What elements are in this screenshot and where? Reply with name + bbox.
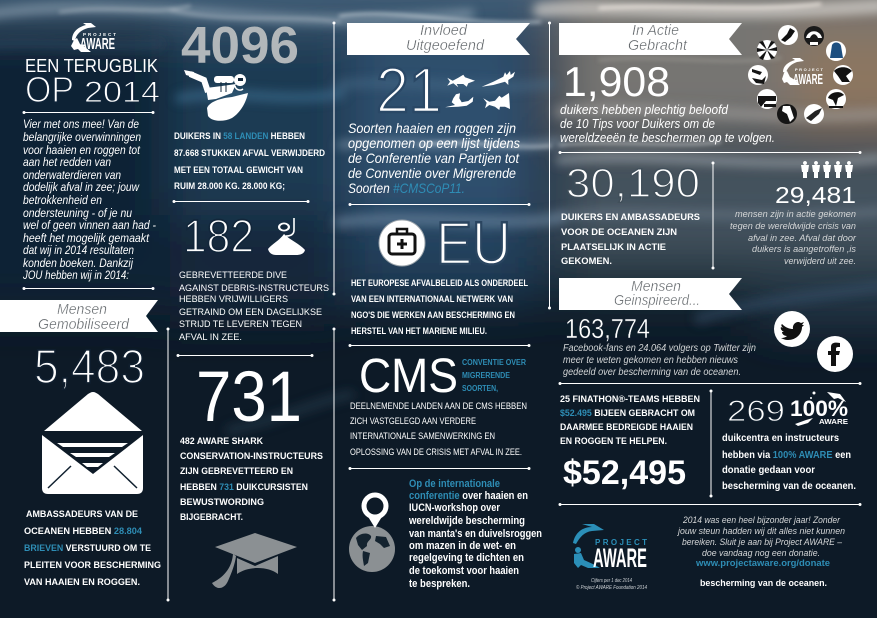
number 29,481: 29,481 — [775, 182, 856, 208]
text: shark conservation: 482 AWARE SHARK — [180, 436, 263, 447]
text: finathon teams: DAARMEE BEDREIGDE HAAIEN — [560, 422, 693, 433]
text: finathon teams — [560, 394, 700, 447]
text: mensen in actie: afval in zee. Afval dat door — [748, 233, 857, 244]
panel: 182 instructeurs — [179, 210, 329, 343]
icon: 100% AWARE logo: AWARE — [819, 419, 848, 426]
intro text: onderwaterdieren van — [23, 168, 121, 182]
text: shark conservation: CONSERVATION-INSTRUCTEURS — [180, 451, 323, 462]
panel: finathon — [560, 394, 700, 492]
panel: 29,481 — [730, 161, 857, 267]
text: closing message: doe vandaag nog een donatie. — [702, 548, 820, 559]
heading CMS: CMS — [359, 350, 458, 403]
icon: 100% AWARE logo: 100% — [790, 396, 848, 421]
text: conferentie: van manta's en duivelsroggen — [409, 528, 542, 540]
text: ambassadeurs: PLEITEN VOOR BESCHERMING — [24, 560, 161, 571]
banner: Geinspireerd... — [614, 292, 700, 309]
text: soorten haaien: de Conferentie van Partijen tot — [348, 150, 520, 166]
text: conferentie: Op de internationale — [409, 478, 500, 490]
text: gebrevetteerde instructeurs: AFVAL IN ZEE. — [179, 332, 242, 343]
icon: five people — [801, 161, 853, 178]
text: conferentie: IUCN-workshop over — [409, 502, 501, 514]
title: OP — [25, 69, 74, 110]
text: gebrevetteerde instructeurs — [179, 270, 329, 343]
text: shark conservation: BIJGEBRACHT. — [180, 512, 243, 523]
intro text: wel of geen vinnen aan had - — [23, 218, 156, 232]
text: closing message: bereiken. Sluit je aan bij Project AWARE – — [682, 537, 843, 548]
title — [25, 56, 160, 110]
icon: twitter — [774, 311, 810, 347]
banner: Gebracht — [628, 37, 688, 54]
panel: 4096 duikers — [174, 17, 325, 192]
icon: ring of ten tips — [748, 25, 853, 124]
text: 10 tips: duikers hebben plechtig beloofd — [560, 102, 729, 117]
logo: Project AWARE center: AWARE — [793, 71, 823, 88]
number 30,190: 30,190 — [566, 160, 700, 206]
icon: first aid kit — [379, 220, 425, 266]
text: conferentie — [408, 478, 542, 590]
text: conferentie: wereldwijde bescherming — [408, 515, 525, 527]
text: soorten haaien: de Conventie over Migrerende — [348, 165, 516, 181]
text: gebrevetteerde instructeurs: GETRAIND OM EEN DAGELIJKSE — [179, 307, 322, 318]
text: conventie over migrerende soorten: CONVENTIE OVER — [462, 358, 526, 367]
banner — [0, 300, 158, 333]
text: finathon teams: $52.495 BIJEEN GEBRACHT OM — [560, 408, 695, 419]
text: mensen in actie: mensen zijn in actie gekomen — [735, 209, 856, 220]
intro text: konden boeken. Dankzij — [23, 256, 133, 270]
text: ambassadeurs: AMBASSADEURS VAN DE — [26, 509, 138, 520]
text: gebrevetteerde instructeurs: AGAINST DEBRIS-INSTRUCTEURS — [179, 283, 329, 294]
banner — [347, 22, 530, 55]
icon: snorkel mask — [268, 218, 305, 255]
intro text: Vier met ons mee! Van de — [23, 117, 139, 131]
banner: Uitgeoefend — [406, 37, 485, 54]
text: gebrevetteerde instructeurs: GEBREVETTEERDE DIVE — [179, 270, 287, 281]
text: footnote — [576, 578, 647, 591]
logo: Project AWARE white — [71, 23, 116, 53]
text: closing message: jouw steun hadden wij dit alles niet kunnen — [676, 526, 845, 537]
banner — [559, 278, 742, 310]
banner: Mensen — [57, 301, 107, 318]
intro text: aan het redden van — [23, 155, 111, 169]
text: footnote: © Project AWARE Foundation 2014 — [576, 584, 647, 591]
logo: Project AWARE blue: AWARE — [593, 543, 647, 573]
icon: 100% AWARE logo — [790, 392, 848, 426]
panel: CMS — [350, 350, 527, 458]
text: duikers en ambassadeurs: VOOR DE OCEANEN ZIJN — [561, 227, 677, 238]
text: conferentie: conferentie over haaien en — [409, 490, 528, 502]
text: duikers en ambassadeurs — [561, 212, 700, 267]
text: facebook fans — [563, 343, 756, 378]
text: soorten haaien — [348, 120, 520, 196]
text: soorten haaien: opgenomen op een lijst tijdens — [348, 135, 520, 151]
text: duikcentra: donatie gedaan voor — [722, 464, 815, 476]
text: Europees afvalbeleid: HERSTEL VAN HET MARIENE MILIEU. — [351, 326, 487, 337]
text: afval verwijderd: 87.668 STUKKEN AFVAL VERWIJDERD — [174, 148, 325, 159]
text: finathon teams: EN ROGGEN TE HELPEN. — [560, 436, 667, 447]
intro text: voor haaien en roggen tot — [23, 143, 141, 157]
text: duikcentra: duikcentra en instructeurs — [722, 432, 839, 444]
logo: Project AWARE white: AWARE — [80, 36, 115, 53]
number 269: 269 — [727, 395, 785, 428]
text: conferentie: te bespreken. — [409, 578, 470, 590]
panel: 731 shark conservation — [180, 358, 323, 588]
text: shark conservation — [180, 436, 323, 523]
intro text: JOU hebben wij in 2014: — [22, 268, 129, 282]
text: duikcentra: hebben via 100% AWARE een — [722, 449, 851, 461]
text: shark conservation: BEWUSTWORDING — [180, 497, 264, 508]
intro text: heeft het mogelijk gemaakt — [23, 231, 150, 245]
text: facebook fans: meer te weten gekomen en hebben nieuws — [563, 355, 738, 366]
icon: diver with bag — [184, 70, 248, 121]
panel: Mensen Geinspireerd — [559, 278, 853, 378]
text: ambassadeurs: BRIEVEN VERSTUURD OM TE — [24, 543, 151, 554]
panel: 269 100% AWARE — [722, 392, 856, 492]
text: duikers en ambassadeurs: PLAATSELIJK IN ACTIE — [561, 242, 666, 253]
text: closing message: www.projectaware.org/donate — [695, 558, 830, 569]
text: conventie over migrerende soorten: MIGRERENDE — [462, 371, 511, 380]
text: Europees afvalbeleid: VAN EEN INTERNATIONAAL NETWERK VAN — [351, 294, 513, 305]
panel: Mensen Gemobiliseerd — [0, 300, 161, 588]
text: conferentie: de toekomst voor haaien — [409, 565, 519, 577]
panel: 30,190 — [561, 160, 700, 267]
text: afval verwijderd: DUIKERS IN 58 LANDEN HEBBEN — [174, 131, 305, 142]
text: conventie over migrerende soorten — [462, 358, 526, 393]
panel: In Actie Gebracht — [559, 22, 853, 145]
banner: Mensen — [631, 278, 681, 295]
panel: EU — [351, 210, 528, 337]
text: facebook fans: gedeeld over bescherming van de oceanen. — [563, 367, 741, 378]
text: duikers en ambassadeurs: GEKOMEN. — [561, 256, 612, 267]
text: facebook fans: Facebook-fans en 24.064 volgers op Twitter zijn — [563, 343, 756, 354]
text: conventie over migrerende soorten: SOORTEN, — [462, 384, 498, 393]
number 1,908: 1,908 — [563, 58, 670, 105]
text: footnote: Cijfers per 1 dec 2014 — [591, 578, 632, 584]
text: gebrevetteerde instructeurs: HEBBEN VRIJWILLIGERS — [179, 294, 288, 305]
text: mensen in actie: duikers is aangetroffen ,is — [752, 244, 856, 255]
panel: internationale conferentie — [349, 478, 542, 590]
intro text: dat wij in 2014 resultaten — [23, 243, 134, 257]
logo: Project AWARE white: PROJECT — [83, 32, 116, 37]
banner: Invloed — [420, 22, 468, 39]
text: mensen in actie: verwijderd uit zee. — [784, 256, 856, 267]
icon: globe with pin — [349, 495, 395, 572]
icon: sharks and rays — [445, 71, 515, 110]
text: deelnemende landen: INTERNATIONALE SAMENWERKING EN — [350, 431, 495, 442]
text: conferentie: om mazen in de wet- en — [409, 540, 516, 552]
text: shark conservation: ZIJN GEBREVETTEERD EN — [180, 466, 293, 477]
text: 10 tips: de 10 Tips voor Duikers om de — [560, 116, 715, 131]
text: deelnemende landen — [350, 401, 527, 458]
text: conferentie: regelgeving te dichten en — [409, 552, 524, 564]
text: duikers en ambassadeurs: DUIKERS EN AMBASSADEURS — [561, 212, 700, 223]
intro text: betrokkenheid en — [23, 193, 102, 207]
number 21: 21 — [376, 54, 442, 126]
text: Europees afvalbeleid: NGO'S DIE WERKEN AAN BESCHERMING EN — [351, 310, 515, 321]
text: ambassadeurs: OCEANEN HEBBEN 28.804 — [24, 526, 143, 537]
number 731: 731 — [196, 358, 302, 437]
panel: closing — [573, 515, 845, 591]
text: duikcentra — [722, 432, 856, 492]
intro text: dodelijk afval in zee; jouw — [23, 180, 140, 194]
text: deelnemende landen: OPLOSSING VAN DE CRISIS MET AFVAL IN ZEE. — [350, 447, 522, 458]
logo: Project AWARE center: PROJECT — [795, 67, 824, 72]
number 5,483: 5,483 — [34, 341, 145, 394]
text: gebrevetteerde instructeurs: STRIJD TE LEVEREN TEGEN — [179, 319, 302, 330]
text: mensen in actie — [730, 209, 857, 267]
logo: Project AWARE center — [782, 58, 824, 88]
text: closing message: bescherming van de oceanen. — [700, 578, 827, 589]
title: 2014 — [84, 76, 160, 109]
banner: In Actie — [632, 22, 679, 39]
text: duikcentra: bescherming van de oceanen. — [722, 480, 856, 492]
text: afval verwijderd: MET EEN TOTAAL GEWICHT VAN — [174, 165, 303, 176]
panel: intro column — [22, 23, 160, 282]
text: soorten haaien: Soorten haaien en roggen zijn — [348, 120, 516, 136]
title: EEN TERUGBLIK — [25, 56, 158, 76]
icon: envelope — [42, 392, 143, 494]
icon: graduation cap — [212, 533, 297, 588]
text: deelnemende landen: DEELNEMENDE LANDEN AAN DE CMS HEBBEN — [350, 401, 527, 412]
text: deelnemende landen: ZICH VASTGELEGD AAN VERDERE — [350, 416, 476, 427]
text: finathon teams: 25 FINATHON®-TEAMS HEBBEN — [560, 394, 700, 405]
number 163,774: 163,774 — [565, 313, 650, 344]
text: afval verwijderd — [174, 131, 325, 192]
number 4096: 4096 — [181, 17, 299, 75]
logo: Project AWARE blue — [573, 524, 647, 573]
text: Europees afvalbeleid: HET EUROPESE AFVALBELEID ALS ONDERDEEL — [351, 278, 528, 289]
intro text — [22, 117, 156, 282]
text: mensen in actie: tegen de wereldwijde crisis van — [730, 221, 856, 232]
panel: Invloed Uitgeoefend — [347, 22, 530, 196]
intro text: ondersteuning - of je nu — [23, 206, 132, 220]
text: closing message: 2014 was een heel bijzonder jaar! Zonder — [682, 515, 841, 526]
text: 10 tips — [560, 102, 775, 145]
text: ambassadeurs — [24, 509, 161, 588]
text: afval verwijderd: RUIM 28.000 KG. 28.000 KG; — [174, 181, 285, 192]
number $52,495: $52,495 — [563, 454, 686, 492]
icon: facebook — [817, 336, 853, 372]
intro text: belangrijke overwinningen — [23, 130, 141, 144]
text: soorten haaien: Soorten #CMSCoP11. — [348, 180, 465, 196]
text: 10 tips: wereldzeeën te beschermen op te volgen. — [560, 130, 775, 145]
logo: Project AWARE blue: PROJECT — [595, 538, 647, 547]
banner — [559, 22, 742, 55]
text: Europees afvalbeleid — [351, 278, 528, 337]
banner: Gemobiliseerd — [38, 316, 130, 333]
text: ambassadeurs: VAN HAAIEN EN ROGGEN. — [24, 577, 140, 588]
text: closing message — [676, 515, 845, 589]
number 182: 182 — [183, 210, 254, 262]
text: shark conservation: HEBBEN 731 DUIKCURSISTEN — [180, 482, 308, 493]
heading EU: EU — [436, 210, 511, 277]
